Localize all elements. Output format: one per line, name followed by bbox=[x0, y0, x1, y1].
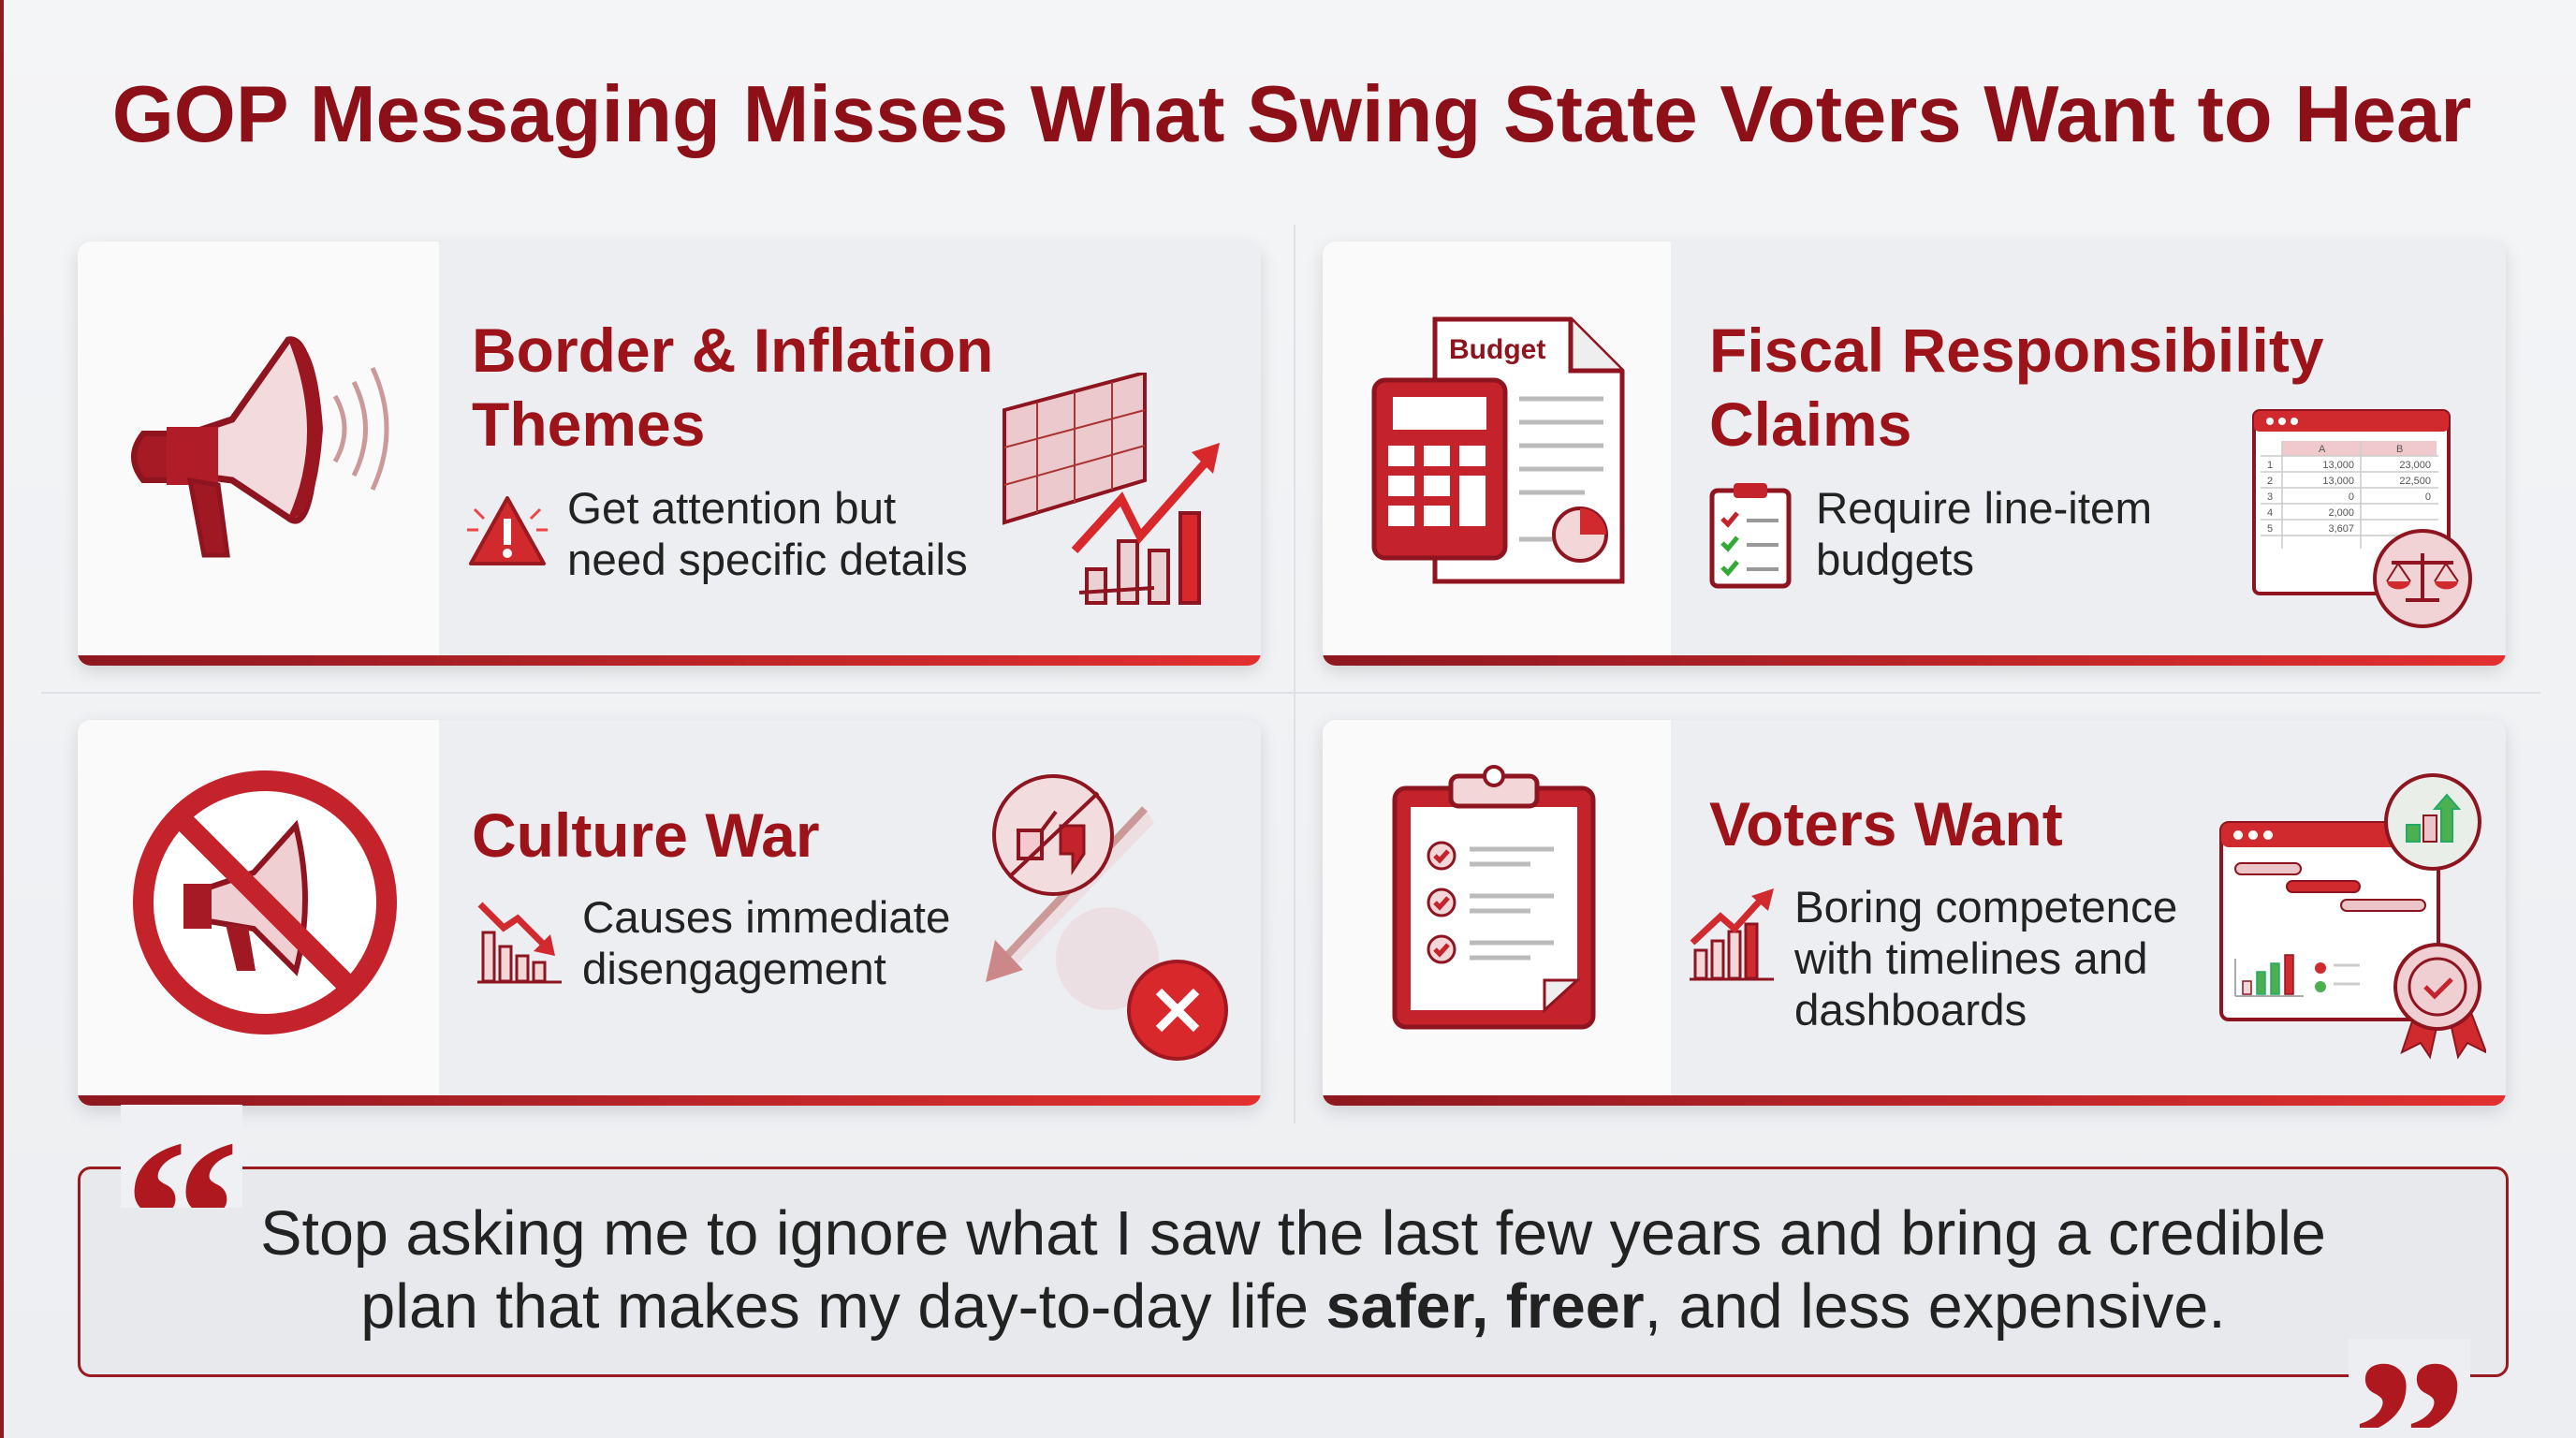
text bbox=[582, 893, 950, 994]
text: disengagement bbox=[582, 945, 886, 994]
text: need specific details bbox=[567, 536, 968, 585]
text: Boring competence bbox=[1794, 883, 2177, 932]
icon: banned megaphone bbox=[133, 770, 397, 1034]
icon: dashboard with badge bbox=[2219, 773, 2486, 1060]
icon: budget document with calculator: Budget bbox=[1449, 334, 1545, 365]
quote box bbox=[78, 1167, 2509, 1377]
icon: spreadsheet with scales: 13,000 bbox=[2322, 460, 2354, 471]
text: Causes immediate bbox=[582, 893, 950, 943]
icon: budget document with calculator bbox=[1372, 316, 1625, 584]
heading: Border & Inflation bbox=[472, 315, 993, 385]
icon: warning bbox=[467, 496, 548, 565]
icon: spreadsheet with scales: 23,000 bbox=[2399, 460, 2431, 471]
icon: spreadsheet with scales: B bbox=[2396, 444, 2403, 455]
title: GOP Messaging Misses What Swing State Voters Want to Hear bbox=[112, 70, 2471, 159]
quote text bbox=[260, 1199, 2326, 1342]
text: Get attention but bbox=[567, 484, 896, 534]
icon: checklist bbox=[1709, 483, 1792, 588]
text bbox=[1794, 883, 2177, 1035]
faint dividers bbox=[1294, 225, 1295, 1123]
heading: Claims bbox=[1709, 389, 1911, 459]
icon: falling chart bbox=[477, 902, 562, 983]
heading bbox=[1709, 315, 2324, 459]
icon: spreadsheet with scales: 0 bbox=[2349, 492, 2354, 503]
icon: spreadsheet with scales: 3,607 bbox=[2328, 523, 2354, 535]
text: with timelines and bbox=[1794, 934, 2148, 984]
panel: fiscal responsibility bbox=[1323, 242, 2506, 666]
text: dashboards bbox=[1794, 986, 2027, 1035]
panel: voters want bbox=[1323, 720, 2506, 1106]
icon: megaphone bbox=[131, 336, 389, 558]
heading: Themes bbox=[472, 389, 705, 459]
icon: spreadsheet with scales: 0 bbox=[2425, 492, 2431, 503]
text: budgets bbox=[1816, 536, 1974, 585]
icon: spreadsheet with scales: 4 bbox=[2267, 507, 2273, 519]
panel: border & inflation bbox=[78, 242, 1261, 666]
heading: Culture War bbox=[472, 800, 820, 870]
icon: spreadsheet with scales: 1 bbox=[2267, 460, 2273, 471]
icon: spreadsheet with scales: 22,500 bbox=[2399, 476, 2431, 487]
text bbox=[567, 484, 968, 585]
icon: spreadsheet with scales: 5 bbox=[2267, 523, 2273, 535]
icon: wall and rising chart bbox=[1003, 373, 1220, 605]
heading: Voters Want bbox=[1709, 789, 2063, 858]
icon: clipboard checklist bbox=[1393, 765, 1595, 1030]
heading bbox=[472, 315, 993, 459]
icon: spreadsheet with scales: A bbox=[2319, 444, 2326, 455]
icon: rising chart bbox=[1690, 888, 1774, 981]
text bbox=[1816, 484, 2152, 585]
heading: Fiscal Responsibility bbox=[1709, 315, 2324, 385]
text: Require line-item bbox=[1816, 484, 2152, 534]
icon: spreadsheet with scales: 2 bbox=[2267, 476, 2273, 487]
icon: thumbs down, down arrow and x bbox=[986, 774, 1228, 1061]
quote text: Stop asking me to ignore what I saw the last few years and bring a credible bbox=[260, 1199, 2326, 1269]
icon: spreadsheet with scales bbox=[2252, 409, 2472, 628]
panel: culture war bbox=[78, 720, 1261, 1106]
icon: spreadsheet with scales: 3 bbox=[2267, 492, 2273, 503]
icon: spreadsheet with scales: 2,000 bbox=[2328, 507, 2354, 519]
quote text: plan that makes my day-to-day life safer, freer, and less expensive. bbox=[360, 1272, 2226, 1342]
icon: spreadsheet with scales: 13,000 bbox=[2322, 476, 2354, 487]
